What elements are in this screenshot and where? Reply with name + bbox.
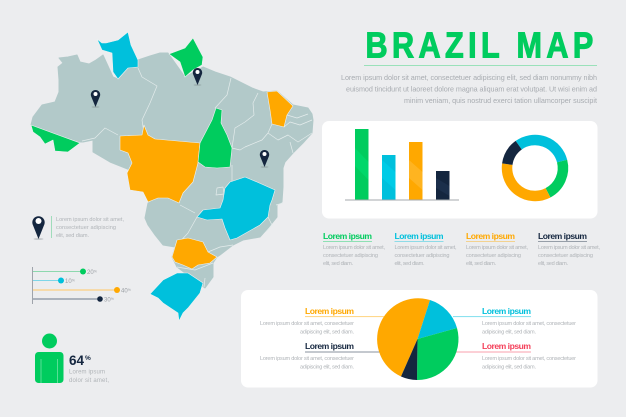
intro paragraph: minim veniam, quis nostrud exerci tation ullamcorper suscipit: [404, 96, 597, 105]
map: Minas Gerais state: [197, 177, 275, 240]
map pin: Amazonas: [91, 90, 100, 108]
map: Mato Grosso state: [120, 125, 200, 203]
map: Acre state: [31, 125, 80, 152]
legend column: orange: [466, 231, 528, 267]
person statistic: [35, 334, 109, 384]
person statistic: Lorem ipsum: [69, 370, 105, 376]
person statistic: 64: [69, 353, 84, 368]
icon: person: [35, 334, 64, 383]
legend column: green: [323, 231, 385, 267]
callout: blue: [453, 306, 576, 336]
lollipop percentage chart: %: [111, 297, 114, 301]
lollipop percentage chart: 40: [121, 288, 128, 294]
icon: location pin: [32, 216, 45, 240]
panel: pie chart: [241, 290, 598, 388]
callout: blue: Lorem ipsum dolor sit amet, consectetuer: [482, 321, 576, 327]
map of Brazil: [31, 32, 313, 321]
callout: red: [455, 341, 576, 370]
location note: consectetuer adipiscing: [56, 225, 116, 231]
lollipop percentage chart: %: [72, 278, 75, 282]
person statistic: dolor sit amet,: [69, 378, 109, 384]
map: state borders: [82, 68, 312, 287]
legend column: blue: Lorem ipsum: [394, 231, 444, 241]
lollipop percentage chart: 20: [87, 270, 94, 276]
legend column: blue: elit, sed diam.: [394, 261, 425, 267]
map: Roraima state: [97, 32, 138, 79]
legend column: navy: elit, sed diam.: [538, 261, 568, 267]
map pin: Bahia: [260, 150, 269, 168]
map pin: Para: [193, 68, 202, 86]
callout: blue: adipiscing elit, sed diam.: [482, 330, 536, 336]
pie chart: [377, 298, 459, 380]
intro paragraph: [341, 73, 597, 105]
legend column: blue: Lorem ipsum dolor sit amet,: [394, 245, 457, 251]
callout: navy: [260, 341, 385, 370]
callout: navy: Lorem ipsum dolor sit amet, consectetuer: [260, 356, 354, 362]
map: Ceara state: [267, 91, 293, 127]
legend column: navy: [538, 231, 600, 267]
legend column: navy: consectetuer adipiscing: [538, 253, 593, 259]
lollipop percentage chart: %: [94, 270, 97, 274]
location note: Lorem ipsum dolor sit amet,: [56, 217, 124, 223]
panel: bar and donut charts: [322, 121, 598, 218]
donut chart: [507, 140, 563, 196]
intro paragraph: euismod tincidunt ut laoreet dolore magna aliquam erat volutpat. Ut wisi enim ad: [346, 84, 597, 94]
callout: orange: [260, 306, 385, 336]
callout: red: Lorem ipsum: [482, 341, 531, 351]
map: grey base country: [31, 53, 313, 288]
callout: orange: Lorem ipsum: [305, 306, 354, 316]
legend column: orange: Lorem ipsum: [466, 231, 515, 241]
legend column: blue: [394, 231, 457, 267]
lollipop percentage chart: 30: [104, 298, 111, 304]
legend column: navy: Lorem ipsum: [538, 231, 587, 241]
callout: navy: adipiscing elit, sed diam.: [300, 364, 354, 370]
map: Amapa state: [169, 38, 203, 77]
map: Tocantins state: [198, 108, 232, 168]
bar chart: [345, 129, 459, 200]
legend column: green: consectetuer adipiscing: [323, 253, 378, 259]
legend column: green: Lorem ipsum dolor sit amet,: [323, 245, 385, 251]
location note: [32, 216, 124, 240]
person statistic: %: [85, 355, 91, 362]
callout: blue: Lorem ipsum: [482, 306, 531, 316]
legend column: green: Lorem ipsum: [323, 231, 372, 241]
callout: orange: adipiscing elit, sed diam.: [300, 330, 354, 336]
lollipop percentage chart: %: [128, 288, 131, 292]
legend column: orange: Lorem ipsum dolor sit amet,: [466, 245, 528, 251]
location note: elit, sed diam.: [56, 233, 89, 239]
lollipop percentage chart: [32, 267, 131, 304]
legend column: blue: consectetuer adipiscing: [394, 253, 450, 259]
legend column: orange: elit, sed diam.: [466, 261, 496, 267]
lollipop percentage chart: 10: [65, 279, 72, 285]
callout: navy: Lorem ipsum: [305, 341, 354, 351]
callout: orange: Lorem ipsum dolor sit amet, consectetuer: [260, 321, 354, 327]
legend column: orange: consectetuer adipiscing: [466, 253, 521, 259]
callout: red: adipiscing elit, sed diam.: [482, 364, 536, 370]
map: Parana state: [172, 238, 217, 269]
intro paragraph: Lorem ipsum dolor sit amet, consectetuer adipiscing elit, sed diam nonummy nibh: [341, 73, 597, 82]
callout: red: Lorem ipsum dolor sit amet, consectetuer: [482, 356, 576, 362]
legend column: green: elit, sed diam.: [323, 261, 353, 267]
legend column: navy: Lorem ipsum dolor sit amet,: [538, 245, 600, 251]
title: BRAZIL MAP: [366, 26, 593, 66]
map: Rio Grande do Sul state: [150, 273, 203, 321]
